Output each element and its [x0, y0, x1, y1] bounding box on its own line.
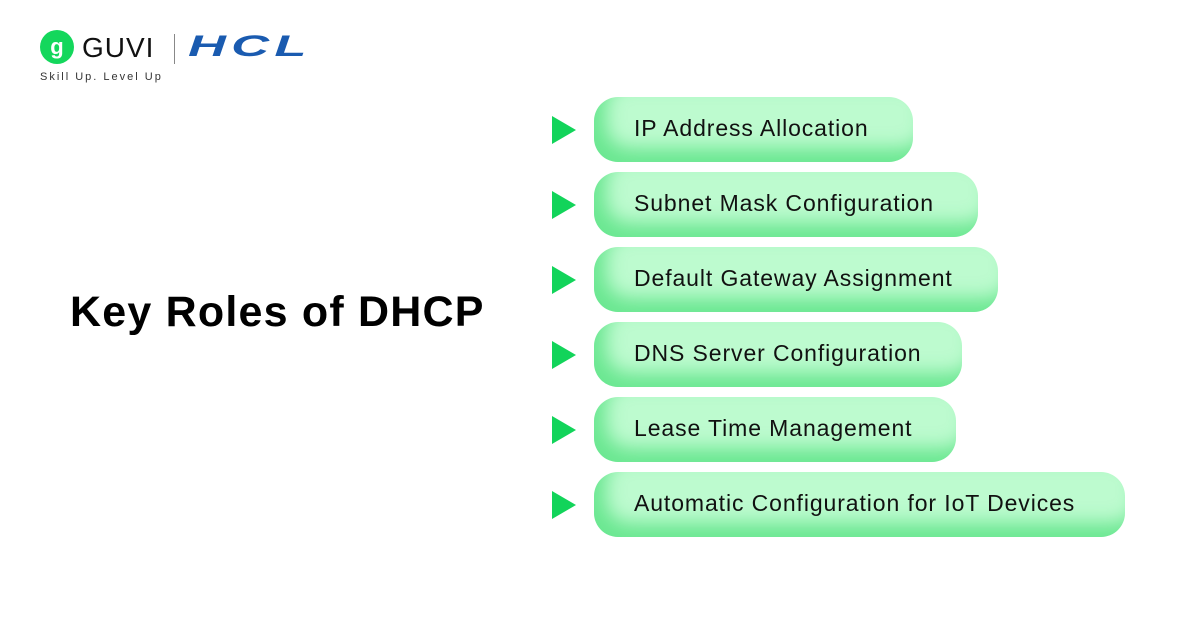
item 1: IP Address Allocation — [634, 115, 869, 141]
logo — [40, 30, 312, 83]
list of roles — [552, 97, 1125, 537]
item 4 — [594, 322, 962, 387]
logo text GUVI: GUVI — [82, 32, 154, 63]
item 3 — [594, 247, 998, 312]
item 5: Lease Time Management — [634, 415, 912, 441]
item 5 — [594, 397, 956, 462]
item 1 — [594, 97, 913, 162]
item 2: Subnet Mask Configuration — [634, 190, 934, 216]
icon: arrow 6 — [552, 491, 576, 519]
icon: arrow 4 — [552, 341, 576, 369]
title: Key Roles of DHCP — [70, 288, 485, 336]
logo text HCL: HCL — [188, 30, 312, 63]
icon: arrow 5 — [552, 416, 576, 444]
icon: guvi circle: g — [50, 34, 64, 59]
icon: guvi circle — [40, 30, 74, 64]
item 6 — [594, 472, 1125, 537]
item 2 — [594, 172, 978, 237]
item 4: DNS Server Configuration — [634, 340, 922, 366]
icon: arrow 1 — [552, 116, 576, 144]
icon: arrow 3 — [552, 266, 576, 294]
icon: arrow 2 — [552, 191, 576, 219]
tagline: Skill Up. Level Up — [40, 71, 163, 83]
item 3: Default Gateway Assignment — [634, 265, 953, 291]
item 6: Automatic Configuration for IoT Devices — [634, 490, 1075, 516]
